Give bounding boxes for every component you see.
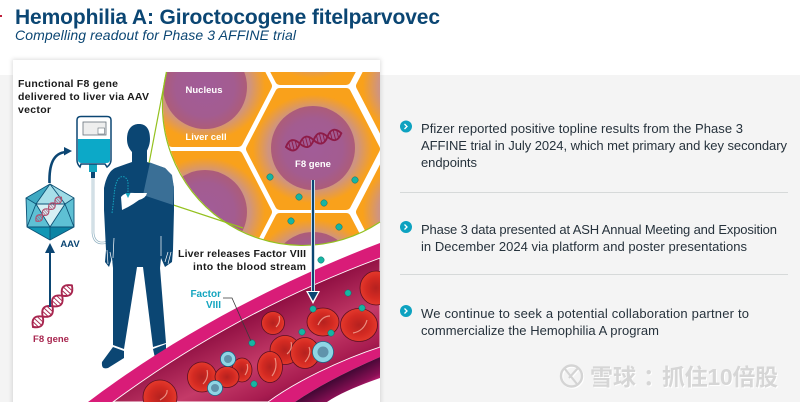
arrow: AAV to IV bag — [49, 147, 72, 183]
label: functional F8 gene — [18, 78, 149, 116]
icon: chevron bullet — [400, 120, 412, 132]
blood vessel — [88, 243, 392, 402]
slide marker — [0, 15, 2, 17]
label: Nucleus: Nucleus — [186, 85, 222, 96]
bullet 1: AFFINE trial in July 2024, which met primary and key secondary — [421, 138, 788, 153]
subtitle: Compelling readout for Phase 3 AFFINE trial — [15, 27, 297, 43]
label: liver releases Factor VIII: into the blood stream — [193, 261, 306, 273]
icon: chevron bullet — [400, 221, 412, 233]
label: F8 gene in nucleus: F8 gene — [295, 159, 331, 170]
label: functional F8 gene: delivered to liver via AAV — [18, 91, 149, 103]
watermark — [561, 364, 778, 390]
arrow: gene to AAV — [45, 243, 55, 307]
panel: illustration card — [10, 58, 382, 402]
icon: DNA in nucleus — [285, 128, 343, 152]
icon: chevron bullet — [400, 305, 412, 317]
label: Factor VIII: Factor — [190, 289, 221, 300]
watermark: 雪球 — [590, 364, 636, 390]
bullet 3: commercialize the Hemophilia A program — [421, 323, 659, 338]
label: Factor VIII: VIII — [206, 300, 221, 311]
magnified liver cells — [163, 72, 380, 245]
Factor VIII dots — [249, 174, 365, 387]
label: liver releases Factor VIII: Liver releases Factor VIII — [178, 248, 306, 260]
watermark: 抓住10倍股 — [662, 364, 778, 390]
bullet 1: endpoints — [421, 155, 478, 170]
icon: person silhouette — [102, 124, 174, 368]
bullet 2: Phase 3 data presented at ASH Annual Meeting and Exposition — [421, 222, 777, 237]
label: Factor VIII — [190, 289, 221, 311]
bullet 2 — [400, 221, 777, 254]
bullet 1: Pfizer reported positive topline results from the Phase 3 — [421, 121, 743, 136]
label: functional F8 gene: Functional F8 gene — [18, 78, 118, 90]
bullet 3 — [400, 305, 749, 338]
icon: F8 gene DNA — [29, 282, 76, 331]
watermark: ： — [643, 364, 666, 390]
label: Liver cell: Liver cell — [185, 132, 227, 143]
label: liver releases Factor VIII — [178, 248, 306, 273]
red blood cells — [143, 271, 392, 402]
liver — [121, 193, 147, 210]
label: functional F8 gene: vector — [18, 104, 51, 116]
icon: AAV capsid — [26, 184, 74, 240]
leader line — [223, 298, 251, 341]
bullet 2: in December 2024 via platform and poster presentations — [421, 239, 748, 254]
bullet 1 — [400, 120, 788, 170]
white blood cells — [208, 342, 334, 396]
label: F8 gene: F8 gene — [33, 334, 69, 345]
bullet 3: We continue to seek a potential collaboration partner to — [421, 306, 749, 321]
title: Hemophilia A: Giroctocogene fitelparvovec — [15, 6, 440, 29]
lens outline and zoom lines — [143, 72, 380, 245]
arrow: liver to bloodstream — [306, 180, 320, 304]
icon: IV bag — [77, 116, 112, 243]
label: AAV: AAV — [60, 239, 80, 250]
